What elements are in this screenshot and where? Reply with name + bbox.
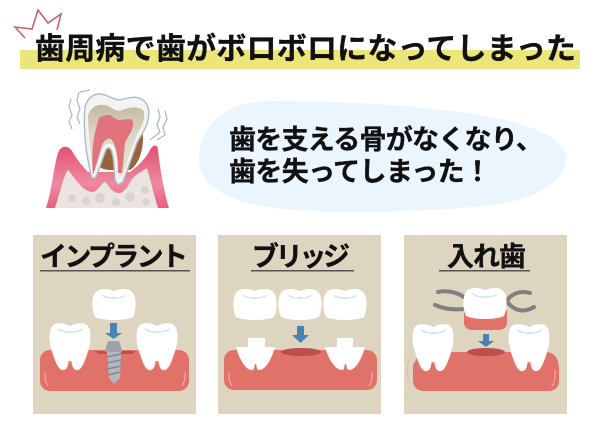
bubble text: 歯を支える骨がなくなり、: [229, 124, 543, 155]
teeth: [412, 324, 550, 371]
gum: [413, 352, 559, 391]
arrow: [478, 334, 494, 347]
abutments: [236, 338, 365, 370]
title: 歯周病で歯がボロボロになってしまった: [35, 32, 576, 66]
panel: speech bubble: [199, 101, 566, 212]
implant crown: [92, 289, 136, 320]
panel: implant: [33, 235, 196, 414]
implant screw: [105, 341, 122, 384]
gum: [224, 350, 377, 390]
clasps: [435, 291, 534, 310]
arrow: [292, 326, 309, 343]
arrow: [105, 323, 122, 339]
icon: surprise mark: [15, 10, 61, 38]
gum: [40, 350, 189, 391]
panel: denture: [404, 235, 567, 414]
bridge crowns: [233, 289, 367, 320]
panel: bridge: [218, 235, 381, 414]
bubble text: [229, 124, 543, 187]
heading: implant: インプラント: [40, 242, 188, 272]
icon: loose tooth with receding gum: [46, 90, 169, 208]
heading: bridge: ブリッジ: [252, 241, 350, 272]
title highlight: [20, 50, 580, 69]
bubble text: 歯を失ってしまった！: [229, 157, 491, 187]
teeth: [49, 323, 178, 370]
denture: [463, 288, 507, 330]
heading: denture: 入れ歯: [447, 242, 526, 272]
